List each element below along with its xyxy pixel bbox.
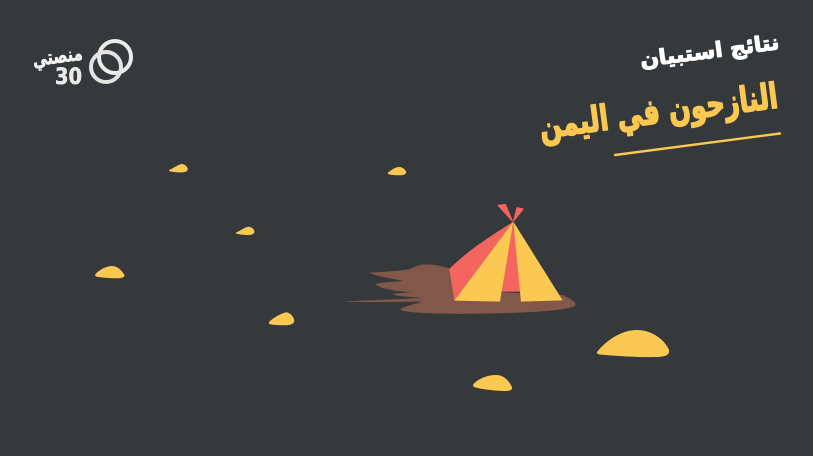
yellow mound middle (236, 227, 254, 235)
yellow mound upper-left (169, 164, 188, 172)
tent left flag (498, 204, 512, 221)
tent right flag (514, 208, 523, 221)
tent right yellow panel (513, 222, 563, 302)
yellow mound centre-left (269, 312, 294, 325)
logo: Manassati 30 (31, 41, 131, 90)
title underline (615, 134, 780, 155)
mud puddle (343, 264, 576, 314)
title line 1: نتائج استبيان (639, 30, 781, 72)
yellow mound bottom (473, 375, 512, 391)
tent opening red (497, 223, 523, 292)
yellow mound large (597, 330, 669, 357)
yellow mound left (95, 266, 125, 278)
title block (537, 30, 781, 155)
yellow mound top (388, 167, 406, 175)
tent left red side (449, 222, 513, 301)
tent left yellow panel (454, 222, 513, 302)
logo: Manassati 30: منصتي (31, 41, 84, 72)
logo: Manassati 30: 30 (55, 65, 82, 90)
tent scene (343, 204, 576, 314)
